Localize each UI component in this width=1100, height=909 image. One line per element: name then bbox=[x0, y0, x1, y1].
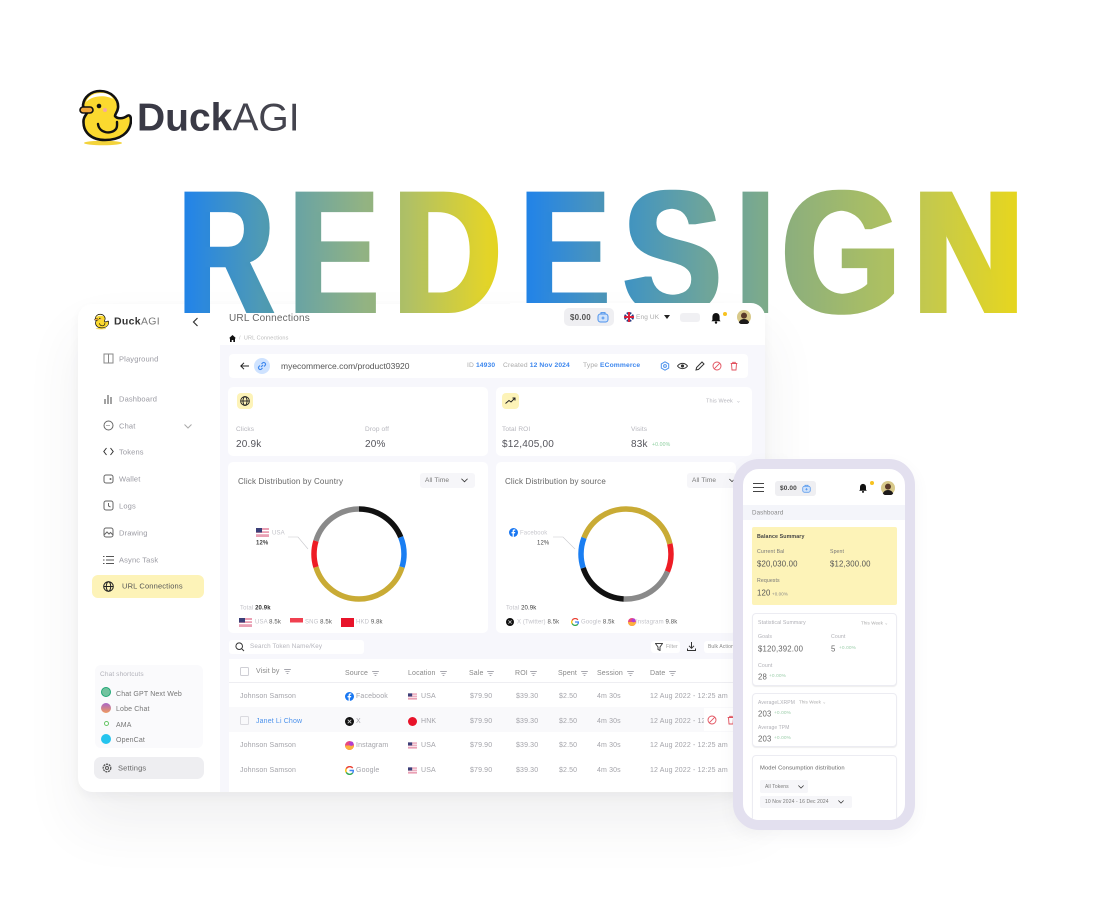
icon: UK flag bbox=[624, 312, 634, 322]
row: Janet Li Chow X: HNK bbox=[421, 718, 436, 725]
row: Johnson Samson Google: 4m 30s bbox=[597, 767, 621, 774]
sidebar wordmark: DuckAGI bbox=[114, 316, 160, 328]
legend bbox=[239, 616, 389, 628]
icon: globe tile bbox=[237, 393, 253, 409]
stat card: ROI and visits bbox=[496, 387, 752, 456]
percent: 12% bbox=[537, 540, 549, 546]
legend: USA 8.5k bbox=[255, 619, 281, 625]
value: clicks: 20.9k bbox=[236, 438, 261, 450]
phone: dashboard strip: Dashboard bbox=[752, 509, 783, 516]
date dropdown bbox=[760, 796, 852, 808]
nav: Drawing: Drawing bbox=[119, 528, 148, 538]
url text: myecommerce.com/product03920 bbox=[281, 361, 410, 371]
date dropdown: 10 Nov 2024 - 16 Dec 2024 bbox=[765, 799, 829, 805]
row: Johnson Samson Instagram: Instagram bbox=[356, 742, 388, 749]
heading: REDESIGN: S bbox=[624, 155, 721, 350]
label: Settings bbox=[118, 764, 146, 772]
phone: balance summary card bbox=[752, 527, 897, 605]
heading: Statistical Summary bbox=[758, 619, 806, 625]
shortcut: Chat GPT Next Web bbox=[101, 687, 182, 697]
nav: Dashboard bbox=[104, 394, 157, 404]
title: Click Distribution by source bbox=[505, 477, 606, 486]
nav: Wallet bbox=[104, 474, 140, 484]
sidebar logo bbox=[94, 314, 160, 330]
icon: block bbox=[712, 362, 722, 370]
legend: HKD bbox=[341, 618, 354, 627]
total: Total 20.9k bbox=[506, 605, 536, 611]
icon: trend tile bbox=[502, 393, 519, 409]
phone: model consumption card bbox=[752, 755, 897, 825]
shortcut: Lobe Chat bbox=[101, 703, 150, 713]
top bar: balance pill bbox=[564, 308, 614, 326]
chart card: click distribution by country bbox=[228, 462, 488, 633]
row: Johnson Samson Instagram: Johnson Samson bbox=[240, 742, 296, 749]
heading: REDESIGN: D bbox=[394, 155, 501, 350]
row: Janet Li Chow X: $2.50 bbox=[559, 718, 577, 725]
heading: REDESIGN: E bbox=[290, 154, 378, 350]
row: Janet Li Chow X: 4m 30s bbox=[597, 718, 621, 725]
label: requests: Requests bbox=[757, 577, 780, 583]
row: Johnson Samson Instagram: 4m 30s bbox=[597, 742, 621, 749]
row: Johnson Samson Instagram: $2.50 bbox=[559, 742, 577, 749]
icon: delete bbox=[730, 362, 738, 370]
row: Johnson Samson Instagram: USA bbox=[421, 742, 436, 749]
change: requests: +0.00% bbox=[772, 591, 788, 596]
icon: back arrow bbox=[240, 362, 249, 370]
row: Johnson Samson Facebook: Facebook bbox=[356, 693, 388, 700]
row: Johnson Samson Facebook: $2.50 bbox=[559, 693, 577, 700]
value: 203 bbox=[758, 734, 771, 743]
legend: SNG bbox=[290, 618, 303, 627]
row: Johnson Samson Google bbox=[229, 759, 733, 783]
row actions bbox=[704, 708, 733, 731]
dropdown bbox=[687, 473, 736, 488]
shortcut: OpenCat bbox=[101, 734, 145, 744]
nav: Chat bbox=[104, 420, 192, 430]
heading: REDESIGN: E bbox=[521, 154, 609, 350]
stat card: clicks and drop-off bbox=[228, 387, 488, 456]
top bar: language bbox=[624, 312, 670, 322]
value: 203 bbox=[758, 709, 771, 718]
page title: URL Connections bbox=[229, 313, 310, 324]
wordmark: DuckAGI bbox=[137, 96, 300, 140]
chart card: click distribution by source bbox=[496, 462, 736, 633]
row: Johnson Samson Google: Johnson Samson bbox=[240, 767, 296, 774]
logo: DuckAGI bbox=[79, 90, 300, 146]
shortcut: AMA: AMA bbox=[116, 721, 132, 728]
row: Johnson Samson Instagram: $79.90 bbox=[470, 742, 492, 749]
legend: USA bbox=[239, 618, 252, 627]
nav: Drawing bbox=[104, 528, 148, 538]
donut chart bbox=[576, 504, 676, 604]
label: Eng UK bbox=[636, 314, 659, 321]
legend: HKD 9.8k bbox=[356, 619, 383, 625]
label: count: Count bbox=[831, 633, 845, 639]
row: Janet Li Chow X bbox=[229, 707, 733, 732]
placeholder: Search Token Name/Key bbox=[250, 643, 322, 650]
row: Johnson Samson Google: $2.50 bbox=[559, 767, 577, 774]
value: spent: $12,300.00 bbox=[830, 559, 871, 568]
avatar bbox=[737, 310, 751, 324]
shortcut: AMA bbox=[104, 721, 132, 728]
row: Johnson Samson Facebook bbox=[229, 685, 733, 709]
icon: gear bbox=[102, 764, 112, 772]
meta: id: ID 14930 bbox=[467, 362, 495, 369]
label: average: AverageLXRPM bbox=[758, 700, 795, 706]
icon: globe bbox=[103, 581, 114, 592]
callout: Facebook 12% bbox=[509, 528, 579, 554]
tokens dropdown bbox=[760, 780, 808, 793]
header checkbox bbox=[240, 667, 249, 676]
value: count: 5 bbox=[831, 644, 836, 653]
heading: Model Consumption distribution bbox=[760, 765, 845, 771]
value: goals: $120,392.00 bbox=[758, 644, 803, 653]
value: count 2: 28 bbox=[758, 672, 767, 681]
value: requests: 120 bbox=[757, 588, 770, 597]
label: USA bbox=[272, 530, 285, 536]
header cover over heading bbox=[510, 303, 765, 345]
phone: avatar bbox=[881, 481, 895, 495]
heading: REDESIGN: R bbox=[179, 154, 273, 350]
phone: average metrics card bbox=[752, 693, 897, 747]
label: TPM: Average TPM bbox=[758, 725, 790, 731]
column: ROI: ROI bbox=[515, 670, 528, 677]
row: Johnson Samson Instagram bbox=[229, 734, 733, 758]
URL bar bbox=[229, 354, 748, 378]
change: +0.00% bbox=[774, 736, 791, 741]
percent: 12% bbox=[256, 540, 268, 546]
legend: SNG 8.5k bbox=[305, 619, 332, 625]
balance: $0.00 bbox=[570, 313, 591, 322]
phone: menu icon bbox=[753, 483, 764, 492]
column: spent: Spent bbox=[558, 670, 577, 677]
label: spent: Spent bbox=[830, 548, 844, 554]
dashboard window shadow and base bbox=[78, 304, 765, 792]
label: count 2: Count bbox=[758, 662, 772, 668]
row: Janet Li Chow X: X bbox=[356, 718, 361, 725]
icon: notification bell bbox=[712, 313, 720, 324]
panel: phone mockup bbox=[733, 459, 915, 830]
column: sale: Sale bbox=[469, 670, 484, 677]
icon: download bbox=[687, 642, 696, 651]
legend: X bbox=[506, 618, 514, 626]
notification dot bbox=[723, 312, 727, 316]
row: Johnson Samson Google: USA bbox=[421, 767, 436, 774]
row: Janet Li Chow X: Janet Li Chow bbox=[256, 718, 302, 725]
change: count: +0.00% bbox=[839, 646, 856, 651]
tokens dropdown: All Tokens bbox=[765, 784, 789, 790]
search box bbox=[229, 640, 364, 654]
label: URL Connections bbox=[122, 582, 183, 590]
leader line bbox=[553, 532, 579, 550]
value: current balance: $20,030.00 bbox=[757, 559, 798, 568]
phone: bell icon bbox=[858, 483, 868, 493]
icon: wallet bag bbox=[598, 312, 608, 322]
nav: Tokens bbox=[103, 448, 144, 456]
nav: Logs bbox=[104, 500, 136, 510]
balance: $0.00 bbox=[780, 485, 797, 492]
icon: link circle bbox=[254, 358, 270, 374]
bulk actions button bbox=[704, 641, 736, 653]
row: Johnson Samson Google: 12 Aug 2022 - 12:25 am bbox=[650, 767, 728, 774]
icon: settings bbox=[660, 361, 670, 371]
row: Johnson Samson Google: $39.30 bbox=[516, 767, 538, 774]
row: Janet Li Chow X: $39.30 bbox=[516, 718, 538, 725]
value: visits: 83k bbox=[631, 438, 648, 450]
icon: pencil bbox=[695, 361, 705, 371]
table: visits bbox=[229, 659, 733, 792]
icon: small duck bbox=[94, 314, 109, 330]
row: Johnson Samson Facebook: $39.30 bbox=[516, 693, 538, 700]
heading: Balance Summary bbox=[757, 533, 805, 539]
legend: Instagram 9.8k bbox=[636, 619, 677, 625]
callout: USA 12% bbox=[256, 528, 312, 554]
phone: notification dot bbox=[870, 481, 874, 485]
nav: URL Connections active bbox=[92, 575, 204, 598]
meta: type: Type ECommerce bbox=[583, 362, 640, 369]
icon: collapse chevron bbox=[192, 318, 198, 326]
row: Johnson Samson Facebook: Johnson Samson bbox=[240, 693, 296, 700]
icon: search bbox=[235, 642, 245, 652]
shortcut: OpenCat: OpenCat bbox=[116, 736, 145, 743]
dropdown bbox=[420, 473, 475, 488]
flag bbox=[256, 528, 269, 537]
legend: Google bbox=[571, 618, 579, 626]
row: Janet Li Chow X: 12 Aug 2022 - 12: bbox=[650, 718, 708, 725]
row: Janet Li Chow X: $79.90 bbox=[470, 718, 492, 725]
filter button: Filter bbox=[666, 644, 678, 650]
phone: balance pill bbox=[775, 481, 816, 496]
table header bbox=[229, 659, 733, 683]
nav: Async Task: Async Task bbox=[119, 556, 158, 564]
nav: Tokens: Tokens bbox=[119, 448, 144, 456]
nav: Dashboard: Dashboard bbox=[119, 394, 157, 404]
value: drop-off: 20% bbox=[365, 438, 386, 450]
label: clicks: Clicks bbox=[236, 426, 254, 433]
heading: REDESIGN: N bbox=[913, 154, 1024, 350]
top bar: toggle bbox=[680, 313, 700, 322]
period filter: This Week ⌄ bbox=[861, 620, 888, 625]
label: drop-off: Drop off bbox=[365, 426, 389, 433]
column: location: Location bbox=[408, 670, 436, 677]
dropdown: All Time bbox=[692, 477, 716, 484]
legend: Instagram bbox=[628, 618, 636, 626]
heading: Chat shortcuts bbox=[100, 671, 144, 678]
period filter: This Week ⌄ bbox=[799, 699, 826, 704]
row: Johnson Samson Instagram: $39.30 bbox=[516, 742, 538, 749]
row: Johnson Samson Instagram: 12 Aug 2022 - 12:25 am bbox=[650, 742, 728, 749]
value: total ROI: $12,405,00 bbox=[502, 438, 554, 450]
nav: Logs: Logs bbox=[119, 502, 136, 510]
heading: REDESIGN: I bbox=[737, 154, 774, 350]
nav: Playground bbox=[104, 354, 158, 364]
row: Johnson Samson Google: $79.90 bbox=[470, 767, 492, 774]
legend: X (Twitter) 8.5k bbox=[517, 619, 559, 625]
leader line bbox=[288, 532, 314, 550]
bulk actions button: Bulk Action bbox=[708, 644, 734, 650]
change: +0.00% bbox=[774, 711, 791, 716]
donut chart bbox=[309, 504, 409, 604]
nav: Wallet: Wallet bbox=[119, 474, 140, 484]
row: Johnson Samson Facebook: 4m 30s bbox=[597, 693, 621, 700]
panel: dashboard window bbox=[92, 303, 764, 779]
legend bbox=[506, 616, 696, 628]
panel: main content background bbox=[220, 345, 765, 792]
total: Total 20.9k bbox=[240, 605, 271, 611]
nav: Chat: Chat bbox=[119, 422, 135, 430]
caret bbox=[664, 315, 670, 319]
column: source: Source bbox=[345, 670, 368, 677]
icon: yellow duck bbox=[79, 90, 132, 146]
filter button bbox=[651, 641, 680, 653]
change: visits: +0.00% bbox=[652, 441, 670, 447]
shortcut: Chat GPT Next Web: Chat GPT Next Web bbox=[116, 690, 182, 697]
label: goals: Goals bbox=[758, 633, 772, 639]
label: current balance: Current Bal bbox=[757, 548, 784, 554]
row: Johnson Samson Facebook: $79.90 bbox=[470, 693, 492, 700]
change: count 2: +0.00% bbox=[769, 674, 786, 679]
column: visit by: Visit by bbox=[256, 668, 280, 675]
period filter: This Week ⌄ bbox=[706, 399, 741, 405]
row: Johnson Samson Google: Google bbox=[356, 767, 379, 774]
label: Facebook bbox=[520, 530, 547, 536]
phone: dashboard strip bbox=[743, 505, 905, 520]
shortcut: Lobe Chat: Lobe Chat bbox=[116, 705, 150, 712]
legend: Google 8.5k bbox=[581, 619, 615, 625]
column: date: Date bbox=[650, 670, 665, 677]
dropdown: All Time bbox=[425, 477, 449, 484]
nav: Playground: Playground bbox=[119, 354, 158, 364]
row: Johnson Samson Facebook: 12 Aug 2022 - 12:25 am bbox=[650, 693, 728, 700]
phone: statistical summary card bbox=[752, 613, 897, 686]
heading: REDESIGN bbox=[179, 154, 1024, 350]
breadcrumb: / URL Connections bbox=[239, 336, 288, 342]
icon: Facebook bbox=[509, 528, 518, 537]
meta: created: Created 12 Nov 2024 bbox=[503, 362, 570, 369]
panel: chat shortcuts bbox=[95, 665, 203, 748]
label: visits: Visits bbox=[631, 426, 647, 433]
settings button bbox=[94, 757, 204, 779]
row: Johnson Samson Facebook: USA bbox=[421, 693, 436, 700]
label: total ROI: Total ROI bbox=[502, 426, 530, 433]
heading: REDESIGN: G bbox=[782, 154, 900, 350]
icon: eye bbox=[677, 362, 688, 370]
panel: sidebar bbox=[92, 314, 204, 779]
column: session: Session bbox=[597, 670, 623, 677]
title: Click Distribution by Country bbox=[238, 477, 343, 486]
icon: wallet bag bbox=[802, 484, 811, 493]
